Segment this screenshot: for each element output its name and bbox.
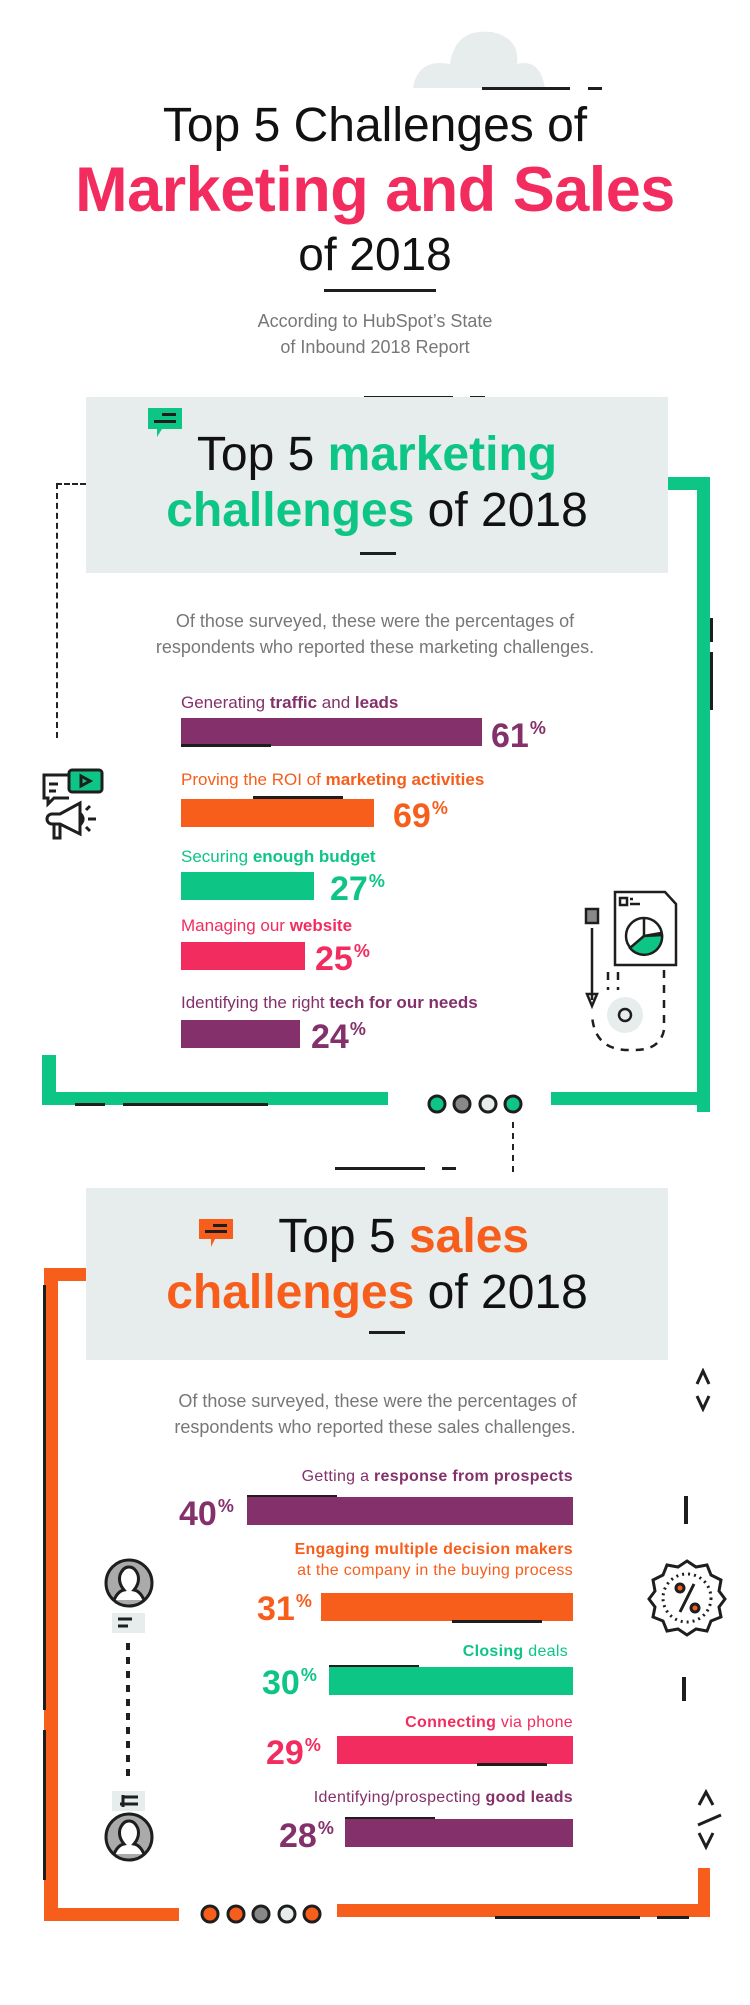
text: sales intro (174, 1391, 577, 1437)
chart: marketing bars: Proving the ROI of marketing activities (181, 770, 484, 789)
heading: marketing (166, 428, 588, 537)
heading: marketing: challenges of 2018 (166, 484, 588, 537)
chart: sales bars: Identifying/prospecting good leads (314, 1789, 573, 1806)
text: marketing intro: respondents who reported these marketing challenges. (156, 637, 594, 657)
chart: sales bars: Getting a response from prospects (302, 1468, 573, 1485)
subtitle: According to HubSpot’s State (258, 311, 492, 331)
frame: marketing green (42, 477, 713, 1112)
chart: marketing bars: Generating traffic and leads (181, 693, 398, 712)
chart: sales bars: 30% (262, 1664, 317, 1702)
icon: people connection (104, 1558, 154, 1862)
title (75, 99, 675, 280)
icon: green speech bubble (148, 408, 182, 437)
dots: sales pagination (200, 1904, 322, 1924)
subtitle (258, 311, 492, 357)
chart: sales bars (179, 1468, 573, 1855)
chart: marketing bars: Identifying the right tech for our needs (181, 993, 478, 1012)
chart: sales bars: Engaging multiple decision makers (295, 1541, 573, 1558)
icon: chevrons top (696, 1368, 710, 1412)
chart: sales bars: Closing deals (463, 1643, 568, 1660)
subtitle: of Inbound 2018 Report (280, 337, 470, 357)
panel header: sales (86, 1188, 668, 1360)
chart: marketing bars (181, 693, 546, 1056)
frame: sales orange (43, 1268, 710, 1921)
text: marketing intro: Of those surveyed, these were the percentages of (176, 611, 574, 631)
title: of 2018 (298, 228, 452, 280)
chart: marketing bars: 69% (393, 797, 448, 835)
chart: sales bars: 40% (179, 1495, 234, 1533)
text: sales intro: Of those surveyed, these were the percentages of (178, 1391, 577, 1411)
chart: sales bars: 31% (257, 1590, 312, 1628)
icon: code tag (697, 1789, 722, 1850)
panel header: marketing (86, 397, 668, 573)
chart: marketing bars: Managing our website (181, 916, 352, 935)
title: Top 5 Challenges of (163, 99, 587, 152)
heading: marketing: Top 5 marketing (197, 428, 557, 481)
chart: sales bars: 29% (266, 1734, 321, 1772)
title: Marketing and Sales (75, 155, 675, 225)
chart: marketing bars: 61% (491, 717, 546, 755)
chart: sales bars: Connecting via phone (405, 1714, 573, 1731)
heading: sales: Top 5 sales (278, 1210, 529, 1263)
icon: discount badge (647, 1559, 727, 1637)
icon: orange speech bubble (199, 1219, 233, 1247)
dots: marketing pagination (428, 1094, 522, 1114)
chart: marketing bars: 24% (311, 1018, 366, 1056)
text: sales intro: respondents who reported these sales challenges. (174, 1417, 576, 1437)
text: marketing intro (156, 611, 594, 657)
heading: sales (166, 1210, 588, 1319)
chart: marketing bars: Securing enough budget (181, 847, 376, 866)
icon: cloud (413, 32, 545, 88)
chart: marketing bars: 25% (315, 940, 370, 978)
chart: sales bars: at the company in the buying process (297, 1562, 573, 1579)
heading: sales: challenges of 2018 (166, 1266, 588, 1319)
icon: report document with gear (584, 890, 678, 1052)
chart: sales bars: 28% (279, 1817, 334, 1855)
icon: megaphone (42, 768, 104, 840)
chart: marketing bars: 27% (330, 870, 385, 908)
